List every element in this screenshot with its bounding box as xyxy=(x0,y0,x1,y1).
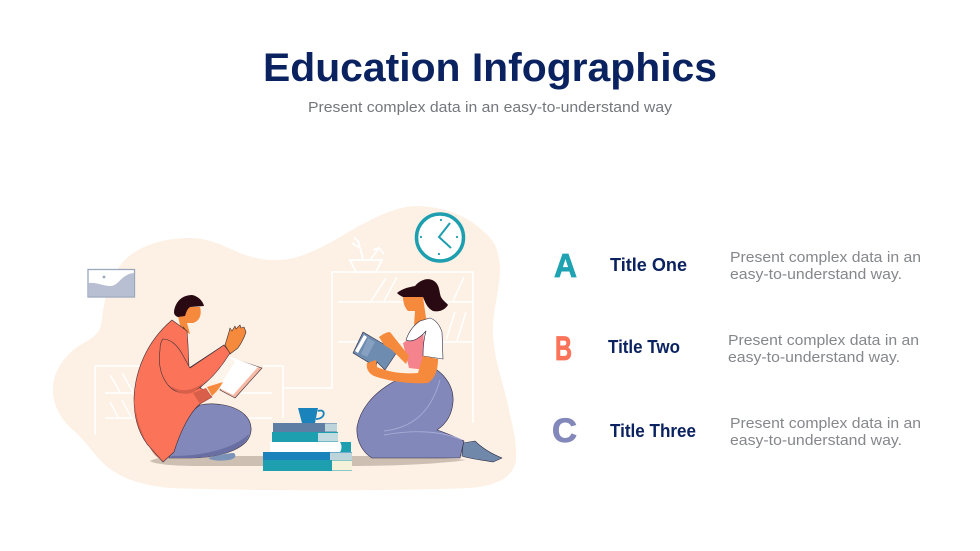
book 2 xyxy=(272,432,338,442)
description two: Present complex data in an xyxy=(728,332,919,349)
raised hand xyxy=(225,325,246,354)
man xyxy=(134,295,262,462)
description two: easy-to-understand way. xyxy=(728,349,900,366)
left shelf lines xyxy=(95,272,473,435)
floor shadow xyxy=(150,456,466,466)
letter B: B xyxy=(555,330,572,368)
item A xyxy=(554,247,921,284)
held book xyxy=(353,332,397,370)
book 4 xyxy=(263,452,352,460)
description three: Present complex data in an xyxy=(730,415,921,432)
man coat xyxy=(134,320,230,462)
man foot xyxy=(208,453,235,461)
book stack xyxy=(263,408,352,471)
description three: easy-to-understand way. xyxy=(730,432,902,449)
wall clock xyxy=(416,214,464,261)
title: Education Infographics xyxy=(263,46,717,90)
woman white blouse xyxy=(406,318,443,359)
background blob xyxy=(53,206,516,490)
subtitle: Present complex data in an easy-to-understand way xyxy=(308,99,673,116)
man neck and face xyxy=(178,307,201,334)
woman pink dress xyxy=(403,330,426,370)
letter A: A xyxy=(554,247,577,284)
title three: Title Three xyxy=(610,421,696,441)
title one: Title One xyxy=(610,255,687,275)
item C xyxy=(552,412,921,450)
book 5 xyxy=(263,460,352,471)
illustration: two people reading xyxy=(53,206,516,490)
man hair xyxy=(174,295,204,317)
man sleeve xyxy=(159,339,230,393)
book 3 xyxy=(270,442,351,452)
man lower hand xyxy=(207,382,223,396)
letter C: C xyxy=(552,412,577,450)
title two: Title Two xyxy=(608,337,680,357)
woman xyxy=(353,279,502,462)
book 1 xyxy=(273,423,337,432)
coffee cup xyxy=(298,408,324,423)
description one: Present complex data in an xyxy=(730,249,921,266)
woman neck and face xyxy=(403,297,430,326)
plant pot line art xyxy=(350,237,384,272)
item B xyxy=(555,330,919,368)
man legs xyxy=(169,404,251,458)
woman arms xyxy=(367,356,438,383)
woman foot xyxy=(462,441,502,462)
wall picture xyxy=(88,270,134,297)
man cuff xyxy=(193,388,212,404)
open book xyxy=(220,357,262,398)
description one: easy-to-understand way. xyxy=(730,266,902,283)
woman hair xyxy=(397,279,448,311)
woman legs xyxy=(357,370,464,458)
